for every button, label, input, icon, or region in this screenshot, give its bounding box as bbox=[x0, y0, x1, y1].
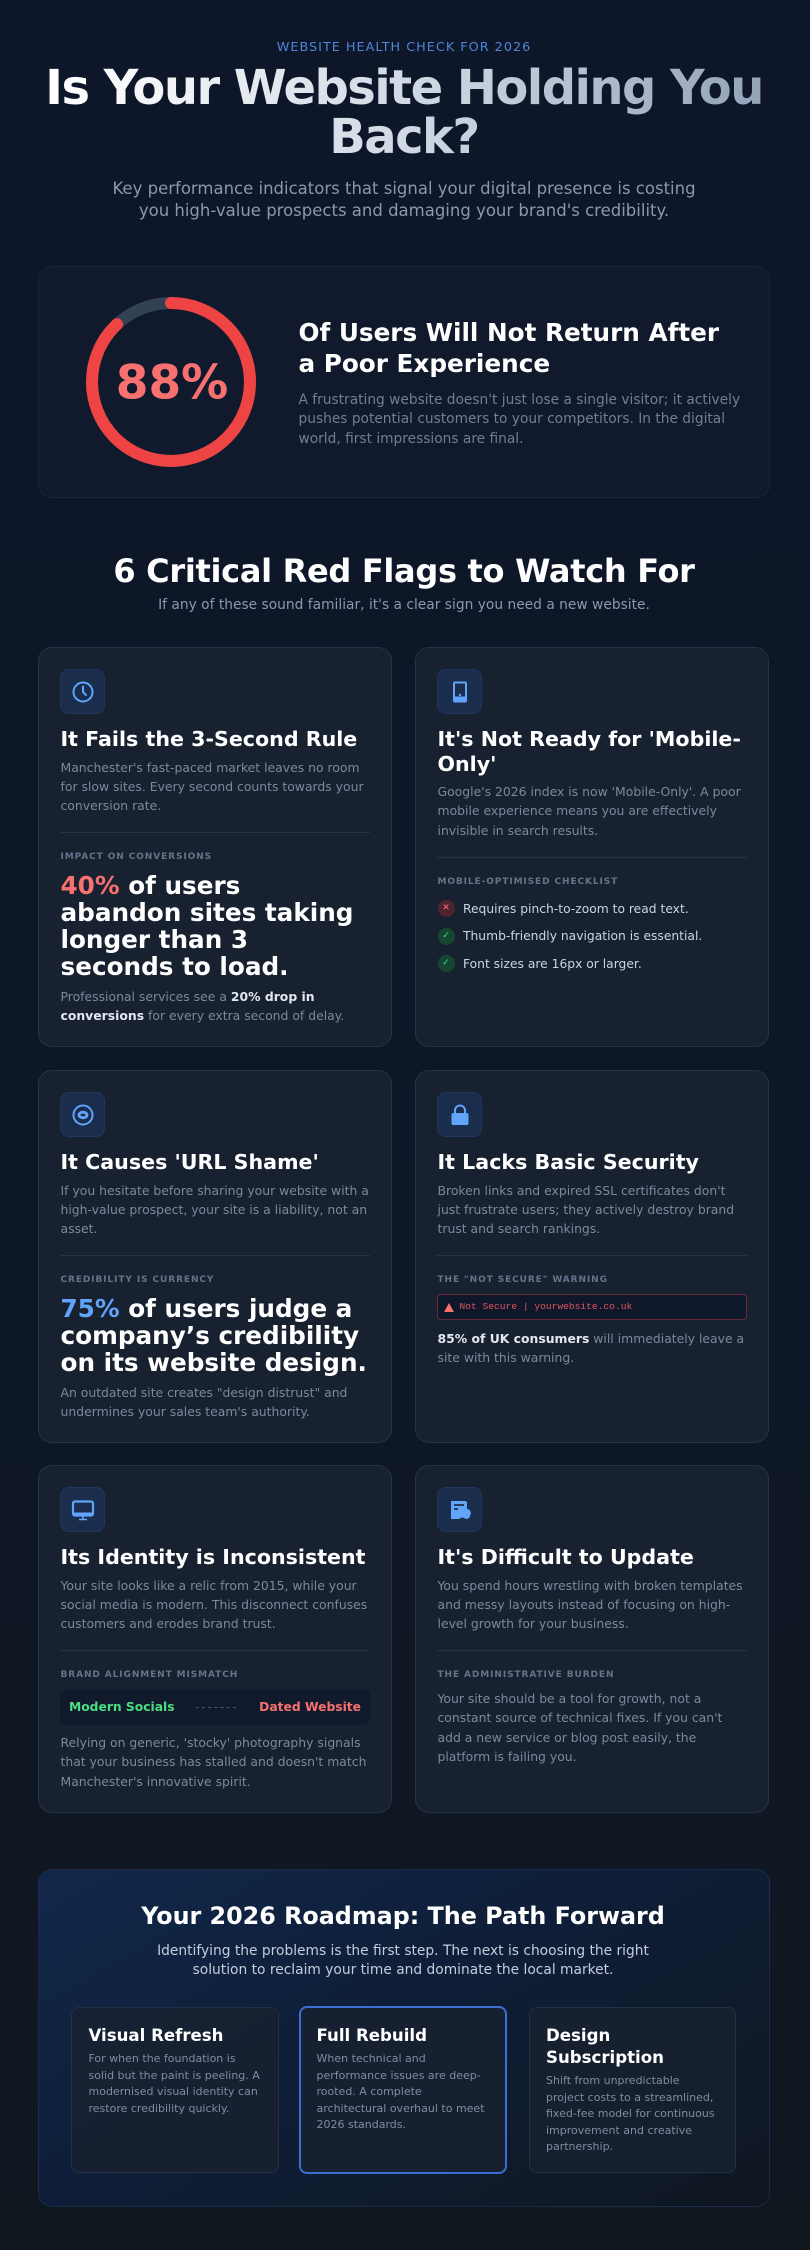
warning text: Not Secure | yourwebsite.co.uk bbox=[460, 1301, 632, 1312]
warning note: site with this warning. bbox=[438, 1350, 574, 1365]
card heading: It Fails the 3-Second Rule bbox=[60, 727, 357, 751]
item text: Requires pinch-to-zoom to read text. bbox=[463, 902, 689, 916]
option title: Visual Refresh bbox=[88, 2026, 223, 2045]
option text: When technical and bbox=[316, 2052, 426, 2065]
subtitle: you high-value prospects and damaging your brand's credibility. bbox=[139, 201, 669, 220]
panel: inconsistent identity bbox=[38, 1465, 392, 1813]
stat heading bbox=[298, 318, 719, 378]
option text: solid but the paint is peeling. A bbox=[88, 2068, 260, 2082]
card description: invisible in search results. bbox=[438, 823, 598, 838]
option text: For when the foundation is bbox=[88, 2052, 236, 2065]
option: full rebuild bbox=[299, 2006, 507, 2174]
cross item: ✕ bbox=[442, 903, 450, 913]
modern label: Modern Socials bbox=[69, 1700, 175, 1714]
stat bbox=[60, 870, 353, 981]
stat description: pushes potential customers to your competitors. In the digital bbox=[298, 411, 725, 427]
dated label: Dated Website bbox=[259, 1700, 361, 1714]
brand mismatch bar bbox=[60, 1690, 370, 1725]
stat: on its website design. bbox=[60, 1348, 367, 1377]
card description bbox=[60, 1578, 367, 1631]
label: CREDIBILITY IS CURRENCY bbox=[60, 1275, 214, 1285]
card description: mobile experience means you are effectively bbox=[438, 803, 717, 818]
option title: Full Rebuild bbox=[316, 2026, 427, 2045]
option: visual refresh bbox=[71, 2007, 278, 2173]
ring chart: 88% bbox=[86, 297, 256, 467]
icon: padlock bbox=[437, 1092, 482, 1137]
card note: constant source of technical fixes. If you can't bbox=[438, 1710, 722, 1725]
option title: Subscription bbox=[546, 2048, 664, 2067]
stat: company’s credibility bbox=[60, 1321, 359, 1350]
roadmap intro bbox=[157, 1942, 649, 1978]
card description: social media is modern. This disconnect confuses bbox=[60, 1597, 367, 1612]
card heading: Its Identity is Inconsistent bbox=[60, 1545, 366, 1569]
card heading: It's Not Ready for 'Mobile- bbox=[438, 727, 741, 751]
panel: 3-second rule bbox=[38, 647, 392, 1047]
eyebrow: WEBSITE HEALTH CHECK FOR 2026 bbox=[277, 40, 531, 54]
stat: abandon sites taking bbox=[60, 898, 353, 927]
section subheading: If any of these sound familiar, it's a clear sign you need a new website. bbox=[158, 597, 650, 613]
subtitle: Key performance indicators that signal your digital presence is costing bbox=[112, 179, 696, 198]
card heading: It Lacks Basic Security bbox=[438, 1150, 699, 1174]
card description: Google's 2026 index is now 'Mobile-Only'. A poor bbox=[438, 784, 741, 799]
stat description: A frustrating website doesn't just lose a single visitor; it actively bbox=[298, 392, 740, 408]
card description: Manchester's fast-paced market leaves no room bbox=[60, 760, 360, 774]
option text: 2026 standards. bbox=[316, 2118, 406, 2131]
check item: ✓ bbox=[442, 930, 450, 940]
stat: 75% of users judge a bbox=[60, 1294, 352, 1322]
panel: mobile-only bbox=[415, 647, 769, 1047]
check item: ✓ bbox=[442, 958, 450, 968]
option text: performance issues are deep- bbox=[316, 2068, 481, 2082]
card note: that your business has stalled and doesn't match bbox=[60, 1754, 366, 1769]
card description bbox=[60, 1182, 369, 1236]
panel: 88 percent stat bbox=[38, 266, 770, 498]
warning box bbox=[437, 1294, 747, 1320]
stat description: world, first impressions are final. bbox=[298, 430, 524, 446]
icon: phone bbox=[437, 669, 482, 714]
card heading: It's Difficult to Update bbox=[438, 1545, 694, 1569]
panel: basic security bbox=[415, 1070, 769, 1443]
stat heading: a Poor Experience bbox=[298, 349, 550, 378]
label: THE ADMINISTRATIVE BURDEN bbox=[438, 1670, 614, 1680]
option text: architectural overhaul to meet bbox=[316, 2102, 485, 2114]
icon: update document bbox=[437, 1487, 482, 1532]
card description: Broken links and expired SSL certificates don't bbox=[438, 1182, 725, 1198]
panel: roadmap bbox=[38, 1869, 770, 2207]
stat bbox=[60, 1294, 367, 1377]
item text: Thumb-friendly navigation is essential. bbox=[463, 929, 702, 943]
check item bbox=[438, 955, 454, 972]
option: design subscription bbox=[528, 2007, 736, 2173]
section heading: 6 Critical Red Flags to Watch For bbox=[113, 552, 695, 590]
warning note bbox=[438, 1330, 744, 1365]
card note: platform is failing you. bbox=[438, 1749, 577, 1764]
panel: URL shame bbox=[38, 1070, 392, 1443]
option text bbox=[316, 2052, 485, 2131]
panel: difficult to update bbox=[415, 1465, 769, 1813]
label: MOBILE-OPTIMISED CHECKLIST bbox=[438, 876, 618, 886]
dashes: ------- bbox=[195, 1700, 239, 1714]
card description: conversion rate. bbox=[60, 798, 161, 813]
card description: You spend hours wrestling with broken templates bbox=[438, 1578, 743, 1592]
option text: improvement and creative bbox=[546, 2124, 692, 2136]
card description: trust and search rankings. bbox=[438, 1221, 600, 1236]
option text: fixed-fee model for continuous bbox=[546, 2107, 715, 2120]
card description bbox=[437, 1182, 734, 1236]
card description: If you hesitate before sharing your website with a bbox=[60, 1182, 369, 1198]
card note bbox=[438, 1691, 722, 1764]
title: Is Your Website Holding You bbox=[45, 60, 763, 116]
title: Back? bbox=[329, 108, 479, 164]
card note: Manchester's innovative spirit. bbox=[60, 1774, 251, 1789]
label: IMPACT ON CONVERSIONS bbox=[60, 852, 212, 862]
option text bbox=[546, 2074, 715, 2153]
stat note: conversions for every extra second of delay. bbox=[60, 1008, 344, 1023]
option text: partnership. bbox=[546, 2140, 613, 2153]
card description bbox=[438, 784, 741, 838]
subtitle bbox=[112, 179, 696, 220]
warning note: 85% of UK consumers will immediately leave a bbox=[438, 1330, 744, 1346]
stat note bbox=[60, 988, 344, 1023]
option text: rooted. A complete bbox=[316, 2085, 422, 2098]
card description: just frustrate users; they actively destroy brand bbox=[438, 1202, 734, 1217]
card heading bbox=[438, 727, 741, 776]
roadmap intro: Identifying the problems is the first step. The next is choosing the right bbox=[157, 1942, 649, 1958]
card description bbox=[60, 760, 364, 813]
stat: 40% of users bbox=[60, 870, 240, 900]
card description: asset. bbox=[60, 1221, 97, 1236]
icon: eye target bbox=[60, 1092, 105, 1137]
ring chart: 88%: 88% bbox=[116, 356, 228, 410]
roadmap intro: solution to reclaim your time and dominate the local market. bbox=[193, 1962, 613, 1978]
card heading: Only' bbox=[438, 752, 496, 776]
card description: and messy layouts instead of focusing on high- bbox=[438, 1597, 730, 1612]
icon: monitor bbox=[60, 1487, 105, 1532]
option text: restore credibility quickly. bbox=[88, 2102, 229, 2114]
icon: clock bbox=[60, 669, 105, 714]
card note: Your site should be a tool for growth, not a bbox=[438, 1691, 701, 1706]
card note: add a new service or blog post easily, the bbox=[438, 1730, 696, 1745]
card description: Your site looks like a relic from 2015, while your bbox=[60, 1578, 357, 1592]
option text: Shift from unpredictable bbox=[546, 2074, 680, 2087]
card description: high-value prospect, your site is a liability, not an bbox=[60, 1202, 367, 1217]
card note bbox=[60, 1735, 366, 1789]
card description bbox=[438, 1578, 743, 1631]
stat: seconds to load. bbox=[60, 952, 289, 981]
option text: project costs to a streamlined, bbox=[546, 2090, 713, 2104]
card description: level growth for your business. bbox=[438, 1616, 629, 1631]
stat: longer than 3 bbox=[60, 925, 248, 954]
option title bbox=[546, 2026, 664, 2067]
option title: Design bbox=[546, 2026, 610, 2045]
card description: for slow sites. Every second counts towards your bbox=[60, 779, 364, 794]
card description: customers and erodes brand trust. bbox=[60, 1616, 276, 1631]
option text: modernised visual identity can bbox=[88, 2085, 258, 2098]
option text bbox=[88, 2052, 260, 2114]
card heading: It Causes 'URL Shame' bbox=[60, 1150, 319, 1174]
checklist bbox=[438, 900, 702, 972]
warning triangle bbox=[444, 1303, 454, 1312]
stat description bbox=[298, 392, 740, 446]
check item bbox=[438, 928, 454, 944]
label: THE "NOT SECURE" WARNING bbox=[438, 1275, 608, 1285]
stat note: Professional services see a 20% drop in bbox=[60, 988, 315, 1004]
label: BRAND ALIGNMENT MISMATCH bbox=[60, 1670, 238, 1680]
stat heading: Of Users Will Not Return After bbox=[298, 318, 719, 347]
roadmap heading: Your 2026 Roadmap: The Path Forward bbox=[141, 1902, 665, 1930]
stat note: An outdated site creates "design distrust" and bbox=[60, 1384, 347, 1400]
title bbox=[30, 64, 778, 162]
stat note bbox=[60, 1384, 347, 1419]
cross item bbox=[438, 900, 454, 917]
card note: Relying on generic, 'stocky' photography signals bbox=[60, 1735, 361, 1750]
item text: Font sizes are 16px or larger. bbox=[463, 956, 642, 970]
stat note: undermines your sales team's authority. bbox=[60, 1404, 310, 1419]
